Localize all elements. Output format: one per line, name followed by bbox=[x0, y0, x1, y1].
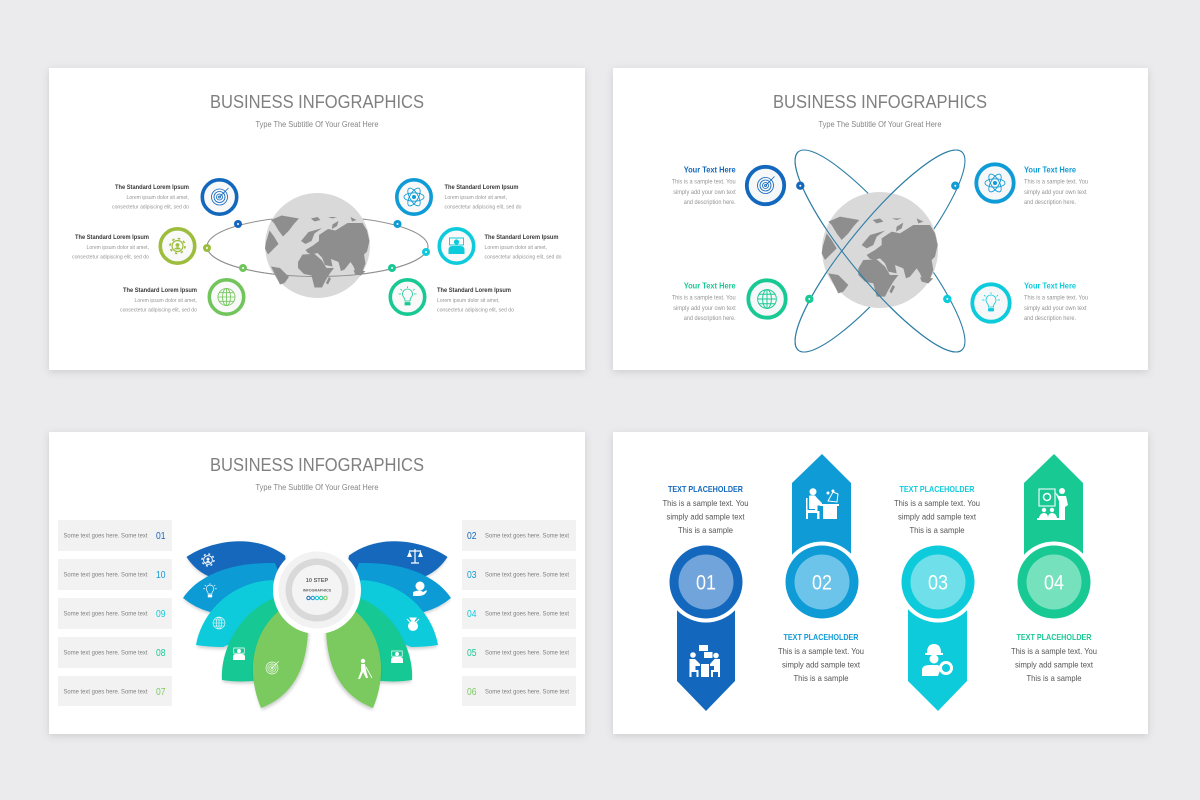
right list: Some text goes here. Some text bbox=[485, 532, 569, 540]
step 01: 01 bbox=[696, 572, 716, 594]
text block: step 01: simply add sample text bbox=[666, 512, 745, 522]
step 01 bbox=[666, 542, 746, 711]
petal icons left bbox=[202, 554, 279, 674]
text block: right top: Lorem ipsum dolor sit amet, bbox=[444, 195, 507, 201]
icon: person at desk bbox=[806, 488, 839, 519]
text block: step 03 bbox=[894, 485, 980, 535]
right list: Some text goes here. Some text bbox=[485, 572, 569, 578]
text block: left middle bbox=[72, 234, 149, 260]
icon: globe bbox=[748, 280, 786, 318]
orbit ring behind globe bbox=[207, 216, 428, 276]
text block: bottom right: This is a sample text. You bbox=[1024, 294, 1088, 302]
text block: bottom right bbox=[1024, 282, 1088, 322]
text block: step 03: This is a sample text. You bbox=[894, 498, 980, 508]
step 04: 04 bbox=[1044, 572, 1064, 594]
text block: step 02: simply add sample text bbox=[782, 660, 861, 670]
icon: light bulb bbox=[972, 284, 1010, 322]
icon: gear bbox=[160, 229, 195, 263]
globe bbox=[822, 192, 938, 308]
step 02 bbox=[782, 454, 862, 622]
panel: globe orbit with six items bbox=[49, 68, 585, 370]
text block: left middle: consectetur adipiscing elit, sed do bbox=[72, 254, 149, 260]
icon: target bbox=[202, 180, 237, 214]
panel: ten step petal fan bbox=[49, 432, 585, 734]
panel 2 subtitle: Type The Subtitle Of Your Great Here bbox=[818, 120, 942, 129]
right list: Some text goes here. Some text bbox=[485, 650, 569, 656]
text block: left middle: The Standard Lorem Ipsum bbox=[75, 234, 149, 241]
left list: 09 bbox=[156, 609, 166, 620]
text block: bottom left: This is a sample text. You bbox=[672, 294, 736, 302]
icon: target bbox=[747, 167, 784, 204]
text block: left bottom: The Standard Lorem Ipsum bbox=[123, 287, 197, 294]
panel: atom orbit globe with four items bbox=[613, 68, 1148, 370]
icon: atom bbox=[976, 164, 1014, 202]
text block: right bottom: consectetur adipiscing elit, sed do bbox=[437, 308, 514, 314]
panel 3 subtitle: Type The Subtitle Of Your Great Here bbox=[256, 483, 379, 492]
text block: right middle bbox=[484, 234, 562, 260]
right list: 03 bbox=[467, 570, 477, 581]
left list: Some text goes here. Some text bbox=[64, 650, 148, 656]
panel 1 subtitle: Type The Subtitle Of Your Great Here bbox=[256, 120, 379, 129]
left list: Some text goes here. Some text bbox=[64, 610, 148, 618]
right list: 02 bbox=[467, 531, 477, 542]
text block: bottom right: simply add your own text bbox=[1024, 305, 1087, 312]
text block: right bottom: Lorem ipsum dolor sit amet, bbox=[437, 298, 500, 304]
left petals bbox=[183, 541, 308, 708]
text block: bottom left: and description here. bbox=[684, 315, 736, 322]
left list: 01 bbox=[156, 531, 166, 542]
panel 1 title: BUSINESS INFOGRAPHICS bbox=[210, 91, 424, 112]
panel: four numbered arrows bbox=[613, 432, 1148, 734]
orbit nodes bbox=[203, 220, 430, 272]
globe bbox=[265, 193, 370, 298]
right list bbox=[462, 520, 576, 706]
text block: step 04: This is a sample text. You bbox=[1011, 646, 1097, 656]
step 04 bbox=[1014, 454, 1094, 622]
text block: step 02: This is a sample text. You bbox=[778, 646, 864, 656]
right list: Some text goes here. Some text bbox=[485, 610, 569, 618]
icon: meeting bbox=[690, 645, 720, 677]
text block: left top bbox=[112, 184, 189, 210]
left list: 07 bbox=[156, 687, 166, 698]
text block: top left: and description here. bbox=[684, 199, 736, 206]
text block: top left bbox=[672, 166, 736, 206]
text block: step 01: This is a sample bbox=[678, 525, 733, 535]
text block: top right: simply add your own text bbox=[1024, 189, 1087, 196]
text block: left middle: Lorem ipsum dolor sit amet, bbox=[86, 245, 149, 251]
text block: top right bbox=[1024, 166, 1088, 206]
text block: top right: This is a sample text. You bbox=[1024, 178, 1088, 186]
text block: step 02 bbox=[778, 633, 864, 683]
orbit nodes bbox=[796, 182, 960, 303]
text block: step 03: TEXT PLACEHOLDER bbox=[900, 485, 975, 494]
icon: light bulb bbox=[390, 280, 425, 314]
icon: team bbox=[439, 229, 474, 263]
text block: bottom left: simply add your own text bbox=[673, 305, 736, 312]
step 02: 02 bbox=[812, 572, 832, 594]
orbit front arc bbox=[207, 246, 428, 276]
left list: 08 bbox=[156, 648, 166, 659]
text block: step 02: TEXT PLACEHOLDER bbox=[784, 633, 859, 642]
text block: step 04: This is a sample bbox=[1026, 673, 1082, 683]
panel 2 title: BUSINESS INFOGRAPHICS bbox=[773, 91, 987, 112]
text block: right middle: The Standard Lorem Ipsum bbox=[484, 234, 559, 241]
text block: right bottom: The Standard Lorem Ipsum bbox=[437, 287, 511, 294]
text block: top left: This is a sample text. You bbox=[672, 178, 736, 186]
text block: left bottom: Lorem ipsum dolor sit amet, bbox=[134, 298, 197, 304]
text block: step 03: This is a sample bbox=[910, 525, 965, 535]
text block: left bottom bbox=[120, 287, 197, 314]
text block: bottom right: and description here. bbox=[1024, 315, 1076, 322]
right list: 06 bbox=[467, 687, 477, 698]
text block: top right: Your Text Here bbox=[1024, 166, 1077, 174]
text block: bottom left bbox=[672, 282, 736, 322]
text block: step 01 bbox=[662, 485, 749, 535]
text block: bottom left: Your Text Here bbox=[684, 282, 736, 290]
orbits behind globe bbox=[775, 133, 985, 369]
text block: right top: The Standard Lorem Ipsum bbox=[444, 184, 519, 191]
text block: right middle: consectetur adipiscing elit, sed do bbox=[484, 254, 562, 260]
icon: globe bbox=[209, 280, 244, 314]
text block: step 02: This is a sample bbox=[794, 673, 849, 683]
right petals bbox=[326, 541, 451, 708]
left list: Some text goes here. Some text bbox=[64, 688, 148, 696]
step 03: 03 bbox=[928, 572, 948, 594]
text block: right middle: Lorem ipsum dolor sit amet, bbox=[484, 245, 547, 251]
orbit front arcs bbox=[795, 150, 962, 352]
text block: right top: consectetur adipiscing elit, sed do bbox=[444, 204, 522, 210]
text block: left top: consectetur adipiscing elit, sed do bbox=[112, 204, 189, 210]
text block: step 04: simply add sample text bbox=[1015, 660, 1094, 670]
petal icons right bbox=[358, 549, 427, 679]
text block: right top bbox=[444, 184, 522, 210]
left list: 10 bbox=[156, 570, 166, 581]
left list: Some text goes here. Some text bbox=[64, 532, 148, 540]
center badge bbox=[273, 546, 361, 634]
text block: left top: Lorem ipsum dolor sit amet, bbox=[126, 195, 189, 201]
icon: engineer with gear bbox=[922, 644, 952, 676]
badge subheading: INFOGRAPHICS bbox=[303, 588, 332, 592]
right list: Some text goes here. Some text bbox=[485, 688, 569, 696]
badge heading: 10 STEP bbox=[306, 578, 328, 584]
text block: step 01: This is a sample text. You bbox=[662, 498, 749, 508]
text block: step 04 bbox=[1011, 633, 1097, 683]
text block: step 01: TEXT PLACEHOLDER bbox=[668, 485, 743, 494]
step 03 bbox=[898, 542, 978, 711]
text block: top right: and description here. bbox=[1024, 199, 1076, 206]
text block: top left: Your Text Here bbox=[684, 166, 736, 174]
icon: presenter bbox=[1037, 488, 1068, 520]
text block: bottom right: Your Text Here bbox=[1024, 282, 1077, 290]
panel 3 title: BUSINESS INFOGRAPHICS bbox=[210, 454, 424, 475]
icon: atom bbox=[397, 180, 431, 214]
text block: top left: simply add your own text bbox=[673, 189, 736, 196]
text block: left bottom: consectetur adipiscing elit, sed do bbox=[120, 308, 197, 314]
right list: 05 bbox=[467, 648, 477, 659]
left list: Some text goes here. Some text bbox=[64, 572, 148, 578]
text block: step 04: TEXT PLACEHOLDER bbox=[1016, 633, 1092, 642]
badge dots bbox=[307, 596, 327, 600]
right list: 04 bbox=[467, 609, 477, 620]
text block: right bottom bbox=[437, 287, 514, 314]
left list bbox=[58, 520, 172, 706]
text block: step 03: simply add sample text bbox=[898, 512, 977, 522]
text block: left top: The Standard Lorem Ipsum bbox=[115, 184, 189, 191]
